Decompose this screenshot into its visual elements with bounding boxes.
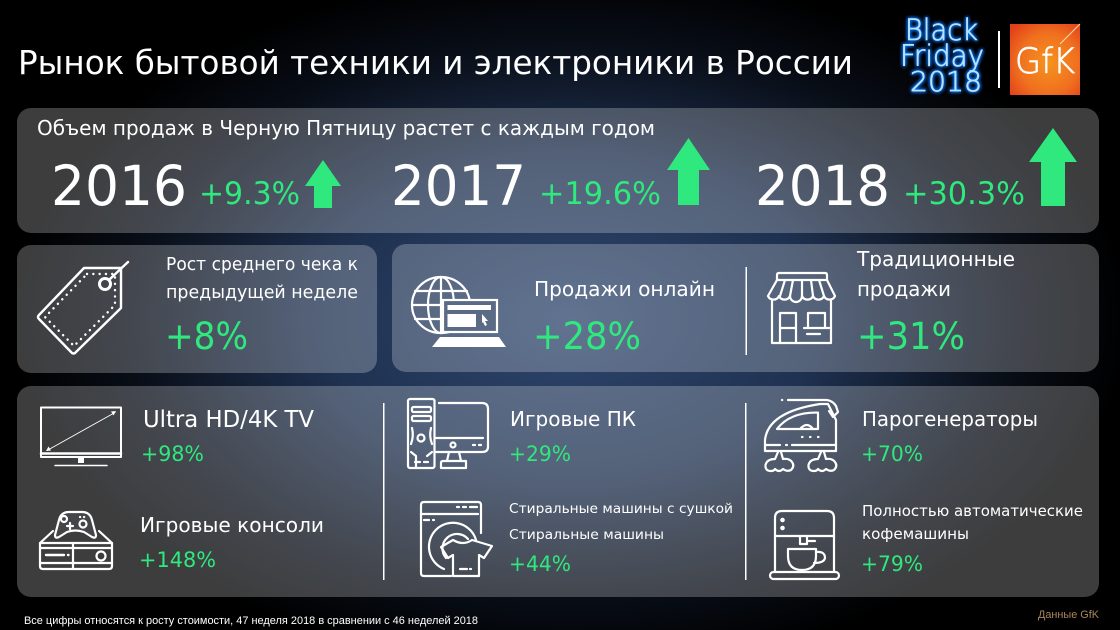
traditional sales text: +31% (857, 315, 965, 358)
gaming PC text: Игровые ПК (510, 407, 636, 431)
logo: Black Friday 2018: 2018 (910, 65, 982, 98)
average check text: предыдущей неделе (166, 283, 358, 303)
traditional sales text: продажи (857, 277, 951, 301)
2018 growth (755, 128, 1077, 218)
logo: Black Friday 2018 (900, 13, 984, 98)
coffee machines text: Полностью автоматические (862, 502, 1083, 520)
2018 growth: 2018 (755, 154, 890, 218)
washing machines text: Стиральные машины с сушкой (509, 501, 733, 517)
gaming PC text (509, 407, 636, 466)
2016 growth: 2016 (51, 154, 187, 218)
online sales text (533, 277, 715, 358)
icon: TV (41, 408, 121, 466)
panel: average check (17, 245, 377, 373)
icon: steam iron (765, 400, 838, 471)
coffee machines text: +79% (861, 552, 923, 576)
2017 growth: 2017 (391, 154, 526, 218)
icon: coffee machine (770, 511, 839, 579)
gaming PC text: +29% (509, 442, 571, 466)
panel heading: Объем продаж в Черную Пятницу растет с каждым годом (37, 116, 655, 140)
panel: product categories (17, 386, 1099, 597)
footnote: Все цифры относятся к росту стоимости, 47 неделя 2018 в сравнении с 46 неделей 2018 (24, 615, 478, 627)
coffee machines text (861, 502, 1083, 576)
coffee machines text: кофемашины (862, 525, 969, 543)
steam generators text (861, 407, 1038, 466)
logo: GfK: GfK (1015, 42, 1075, 82)
2018 growth: +30.3% (903, 176, 1025, 212)
panel: sales channels (392, 244, 1099, 372)
average check text: Рост среднего чека к (166, 255, 358, 275)
game consoles text: Игровые консоли (140, 513, 324, 537)
2016 growth: +9.3% (199, 176, 300, 212)
logo: Black Friday 2018: Black (905, 13, 978, 47)
logo: Black Friday 2018: Friday (900, 39, 984, 73)
title: Рынок бытовой техники и электроники в России (18, 43, 853, 82)
traditional sales text (856, 247, 1015, 358)
panel: yearly growth (17, 108, 1099, 233)
steam generators text: +70% (861, 442, 923, 466)
Ultra HD text (141, 407, 314, 466)
game consoles text: +148% (139, 548, 216, 572)
icon: price tag (38, 262, 128, 354)
icon: game console (40, 512, 112, 569)
icon: gaming PC (408, 399, 488, 468)
Ultra HD text: Ultra HD/4K TV (143, 407, 314, 433)
washing machines text: +44% (509, 552, 571, 576)
source: Данные GfK (1038, 609, 1100, 621)
game consoles text (139, 513, 324, 572)
icon: store (768, 273, 835, 343)
2017 growth (391, 138, 710, 218)
2017 growth: +19.6% (539, 176, 661, 212)
logo: GfK (1010, 24, 1080, 95)
steam generators text: Парогенераторы (862, 407, 1038, 431)
2016 growth (51, 154, 341, 218)
average check text: +8% (165, 315, 248, 358)
traditional sales text: Традиционные (856, 247, 1015, 271)
icon: washing machine (421, 502, 492, 576)
online sales text: Продажи онлайн (534, 277, 715, 301)
Ultra HD text: +98% (141, 442, 204, 466)
online sales text: +28% (533, 315, 641, 358)
washing machines text (509, 501, 733, 576)
average check text (165, 255, 358, 358)
icon: online sales (412, 277, 506, 347)
washing machines text: Стиральные машины (509, 527, 664, 543)
